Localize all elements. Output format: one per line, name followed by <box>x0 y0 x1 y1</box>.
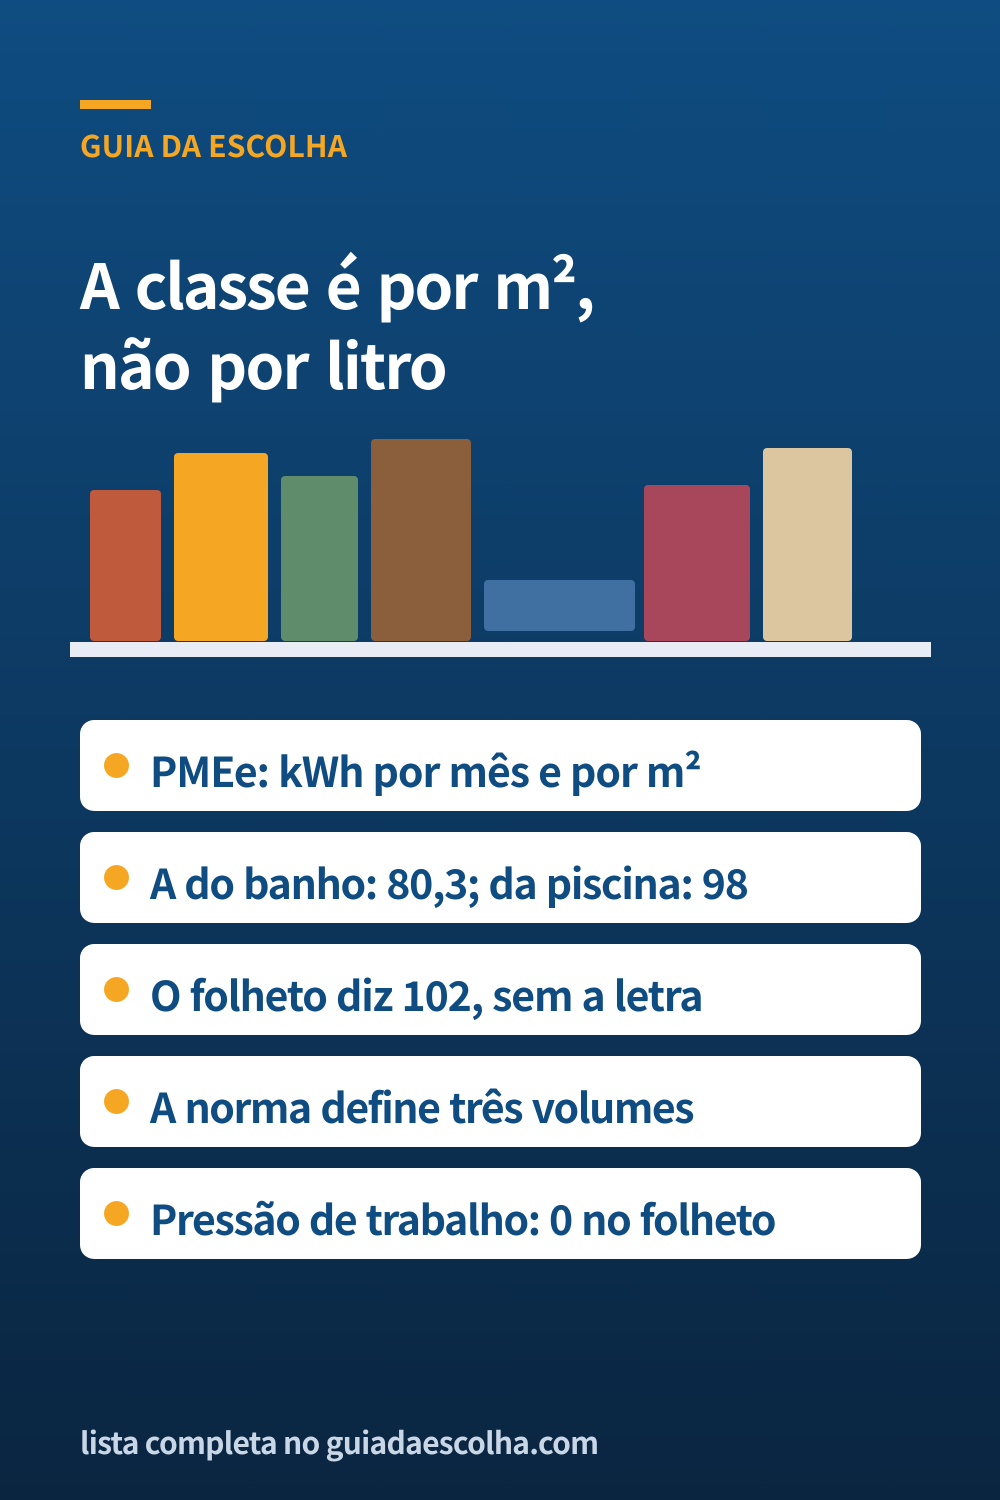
card: banho e piscina <box>80 832 921 923</box>
bullet <box>104 753 129 778</box>
book: crimson <box>644 485 750 641</box>
bullet <box>104 1201 129 1226</box>
footer: lista completa no guiadaescolha.com <box>80 1419 598 1463</box>
card text: A do banho: 80,3; da piscina: 98 <box>150 851 748 911</box>
brand label: GUIA DA ESCOLHA <box>80 122 347 166</box>
title: não por litro <box>80 317 446 407</box>
book: red <box>90 490 161 641</box>
card text: PMEe: kWh por mês e por m² <box>150 739 701 799</box>
book: cream <box>763 448 852 641</box>
shelf chart with books <box>70 439 931 657</box>
shelf <box>70 642 931 657</box>
card: norma <box>80 1056 921 1147</box>
title: A classe é por m², <box>80 237 593 327</box>
bullet <box>104 977 129 1002</box>
book: brown <box>371 439 471 641</box>
card: folheto <box>80 944 921 1035</box>
book: orange <box>174 453 268 641</box>
bullet <box>104 1089 129 1114</box>
card text: Pressão de trabalho: 0 no folheto <box>150 1187 775 1247</box>
card: PMEe <box>80 720 921 811</box>
book: blue lying flat <box>484 580 635 631</box>
accent bar <box>80 100 151 109</box>
card text: A norma define três volumes <box>150 1075 693 1135</box>
bullet <box>104 865 129 890</box>
card: pressão <box>80 1168 921 1259</box>
card text: O folheto diz 102, sem a letra <box>150 963 702 1023</box>
title <box>80 237 593 407</box>
book: green <box>281 476 358 641</box>
